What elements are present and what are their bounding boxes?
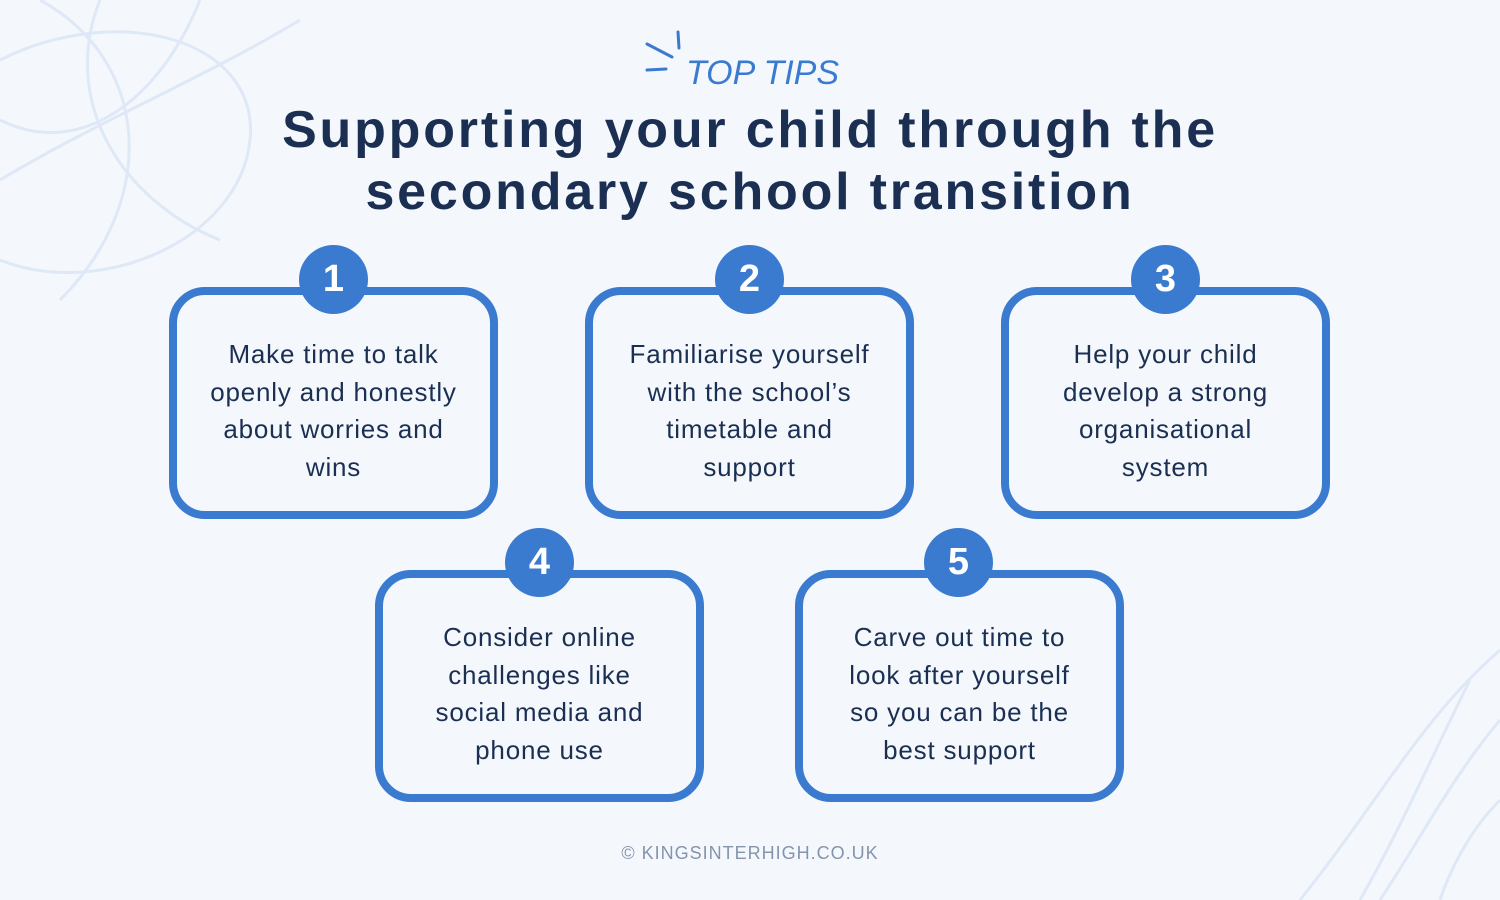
title: Supporting your child through the — [282, 101, 1218, 159]
panel: tip 3 — [1001, 287, 1330, 519]
badge 5 — [924, 528, 993, 597]
panel: tip 2: timetable and — [666, 414, 833, 444]
panel: tip 3: organisational — [1079, 414, 1252, 444]
badge 2 — [715, 245, 784, 314]
panel: tip 4: social media and — [436, 697, 643, 727]
panel: tip 1: wins — [306, 452, 361, 482]
title — [282, 101, 1218, 221]
badge 1 — [299, 245, 368, 314]
panel: tip 4: challenges like — [448, 660, 631, 690]
panel: tip 4 — [375, 570, 704, 802]
panel: tip 3: develop a strong — [1063, 376, 1268, 406]
badge 3 — [1131, 245, 1200, 314]
panel: tip 5: look after yourself — [849, 660, 1070, 690]
panel: tip 3: system — [1122, 452, 1209, 482]
panel: tip 3: Help your child — [1074, 339, 1257, 369]
panel: tip 1: about worries and — [223, 414, 444, 444]
panel: tip 2: support — [703, 452, 796, 482]
badge 1: 1 — [323, 258, 344, 300]
panel: tip 5: best support — [883, 734, 1036, 764]
icon: spark lines — [645, 30, 680, 72]
badge 4 — [505, 528, 574, 597]
title: secondary school transition — [365, 163, 1135, 221]
panel: tip 5 — [795, 570, 1124, 802]
panel: tip 2: with the school’s — [648, 376, 851, 406]
panel: tip 5: so you can be the — [850, 697, 1069, 727]
panel: tip 2: Familiarise yourself — [630, 339, 869, 369]
panel: tip 4: phone use — [475, 734, 604, 764]
panel: tip 1: Make time to talk — [228, 339, 439, 369]
footer: © KINGSINTERHIGH.CO.UK — [621, 843, 879, 863]
panel: tip 5: Carve out time to — [854, 622, 1065, 652]
badge 4: 4 — [529, 541, 550, 583]
panel: tip 2 — [585, 287, 914, 519]
badge 5: 5 — [948, 541, 969, 583]
badge 2: 2 — [739, 258, 760, 300]
badge 3: 3 — [1155, 258, 1176, 300]
panel: tip 1: openly and honestly — [210, 376, 457, 406]
panel: tip 1 — [169, 287, 498, 519]
subtitle: top tips: TOP TIPS — [686, 54, 839, 92]
panel: tip 4: Consider online — [443, 622, 636, 652]
